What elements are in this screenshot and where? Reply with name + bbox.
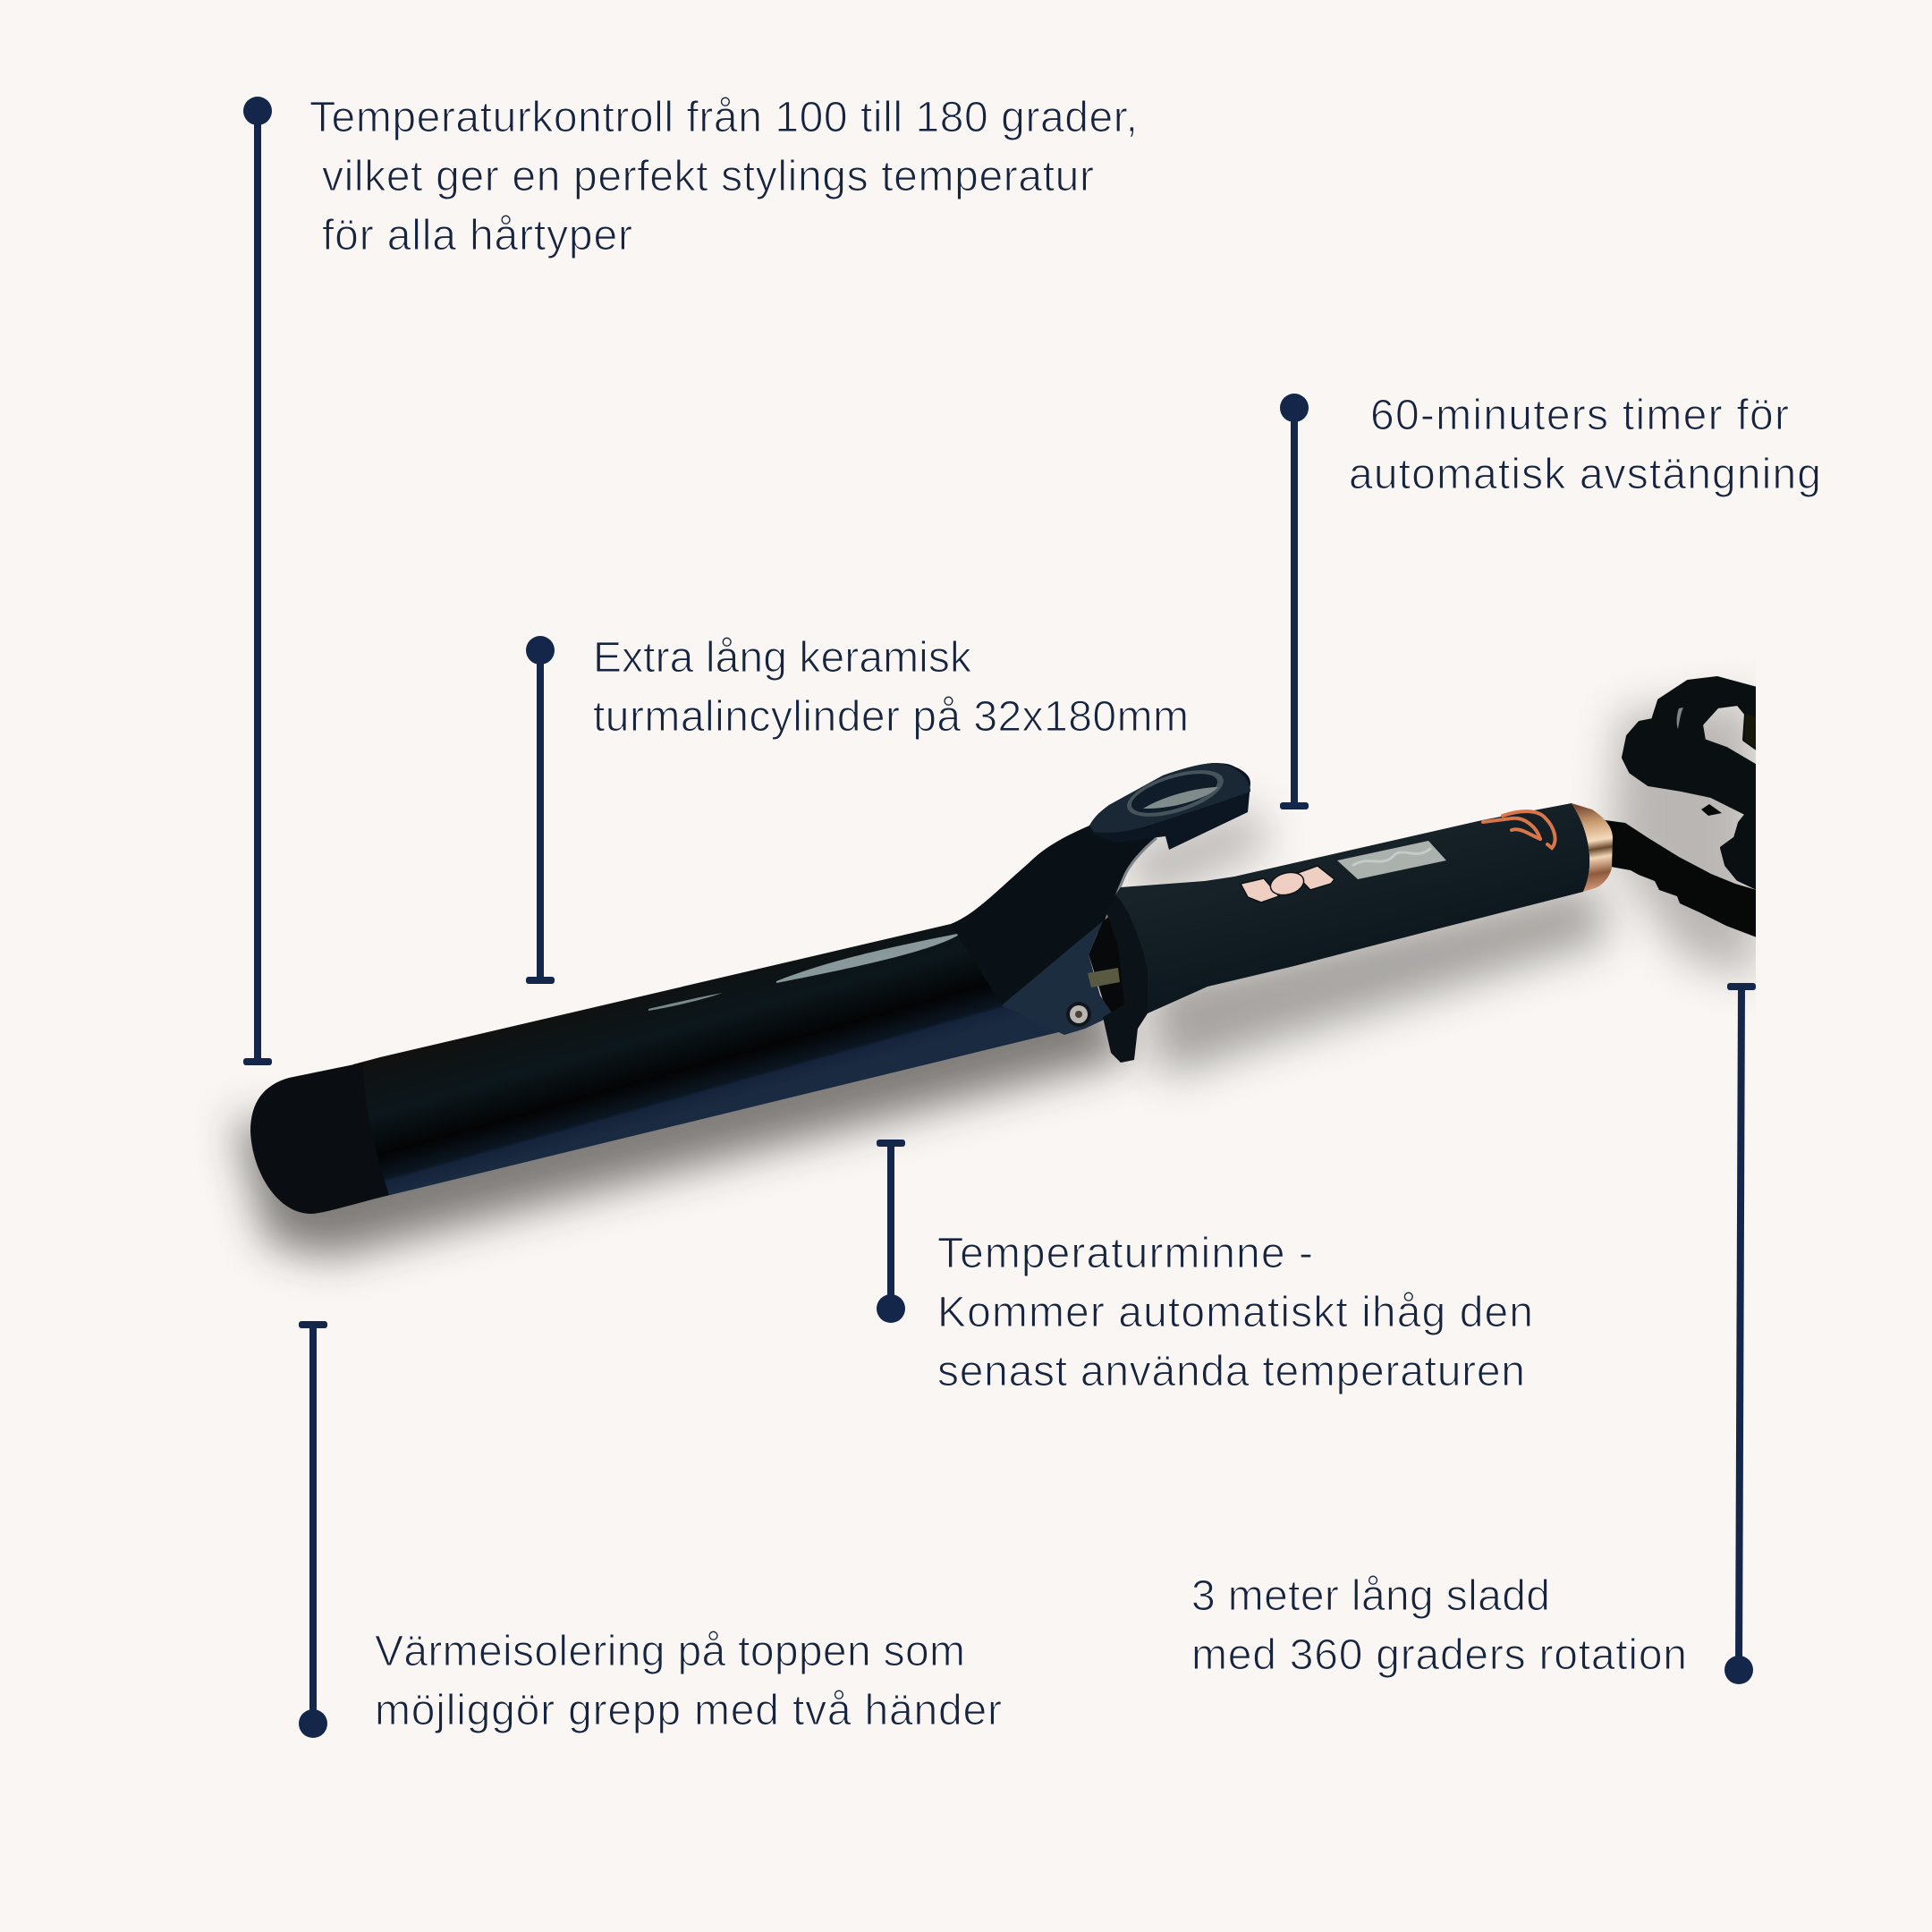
coil glint	[1677, 708, 1683, 729]
insulated tip	[250, 1063, 389, 1214]
clamp paddle	[1089, 761, 1250, 850]
text: automatisk avstängning	[1349, 451, 1821, 498]
text: vilket ger en perfekt stylings temperatur	[322, 153, 1094, 200]
handle flange	[1103, 894, 1148, 1063]
barrel highlights	[648, 933, 962, 1011]
text: Temperaturminne -	[937, 1230, 1313, 1277]
text: Extra lång keramisk	[593, 634, 972, 682]
marker line	[877, 1140, 905, 1323]
cord fleck	[1701, 804, 1722, 816]
callout: heat insulation	[299, 1321, 1002, 1738]
marker line	[1280, 394, 1309, 809]
cord coil	[1623, 678, 1757, 888]
text: senast använda temperaturen	[937, 1348, 1525, 1395]
text: möjliggör grepp med två händer	[375, 1687, 1002, 1734]
callout: ceramic cylinder	[526, 634, 1189, 984]
control buttons	[1241, 866, 1335, 902]
power cord	[1592, 678, 1757, 937]
marker line	[526, 636, 555, 984]
chrome blade	[1106, 838, 1157, 921]
inner rod backing	[1089, 908, 1132, 1020]
marker line	[1724, 983, 1756, 1684]
inner rod	[1088, 968, 1120, 987]
display	[1337, 841, 1446, 879]
barrel	[353, 924, 1073, 1199]
text: med 360 graders rotation	[1191, 1631, 1687, 1679]
handle	[1115, 803, 1589, 1013]
text: Kommer automatiskt ihåg den	[937, 1289, 1533, 1336]
gold collar	[1572, 803, 1613, 892]
text: Värmeisolering på toppen som	[375, 1628, 965, 1675]
marker line	[243, 97, 272, 1065]
paddle top face	[1089, 763, 1250, 833]
callout: temperature control	[243, 94, 1138, 1065]
clamp arm	[951, 826, 1157, 1005]
logo	[1483, 811, 1555, 848]
curling iron product photo	[234, 678, 1757, 1257]
text: Temperaturkontroll från 100 till 180 grader,	[309, 94, 1138, 141]
callout: timer	[1280, 392, 1821, 809]
coil olive patch	[1744, 714, 1757, 749]
text: 60-minuters timer för	[1370, 392, 1789, 439]
infographic canvas	[211, 97, 1818, 1738]
callout: cord	[1191, 983, 1756, 1684]
paddle recess	[1122, 761, 1229, 826]
product drop shadow	[234, 698, 1756, 1257]
marker line	[299, 1321, 327, 1738]
text: för alla hårtyper	[322, 212, 632, 259]
screw	[1066, 1002, 1091, 1027]
callout: temperature memory	[877, 1140, 1533, 1395]
text: turmalincylinder på 32x180mm	[593, 693, 1189, 741]
text: 3 meter lång sladd	[1191, 1572, 1550, 1620]
clamp hinge plate	[1002, 921, 1114, 1035]
